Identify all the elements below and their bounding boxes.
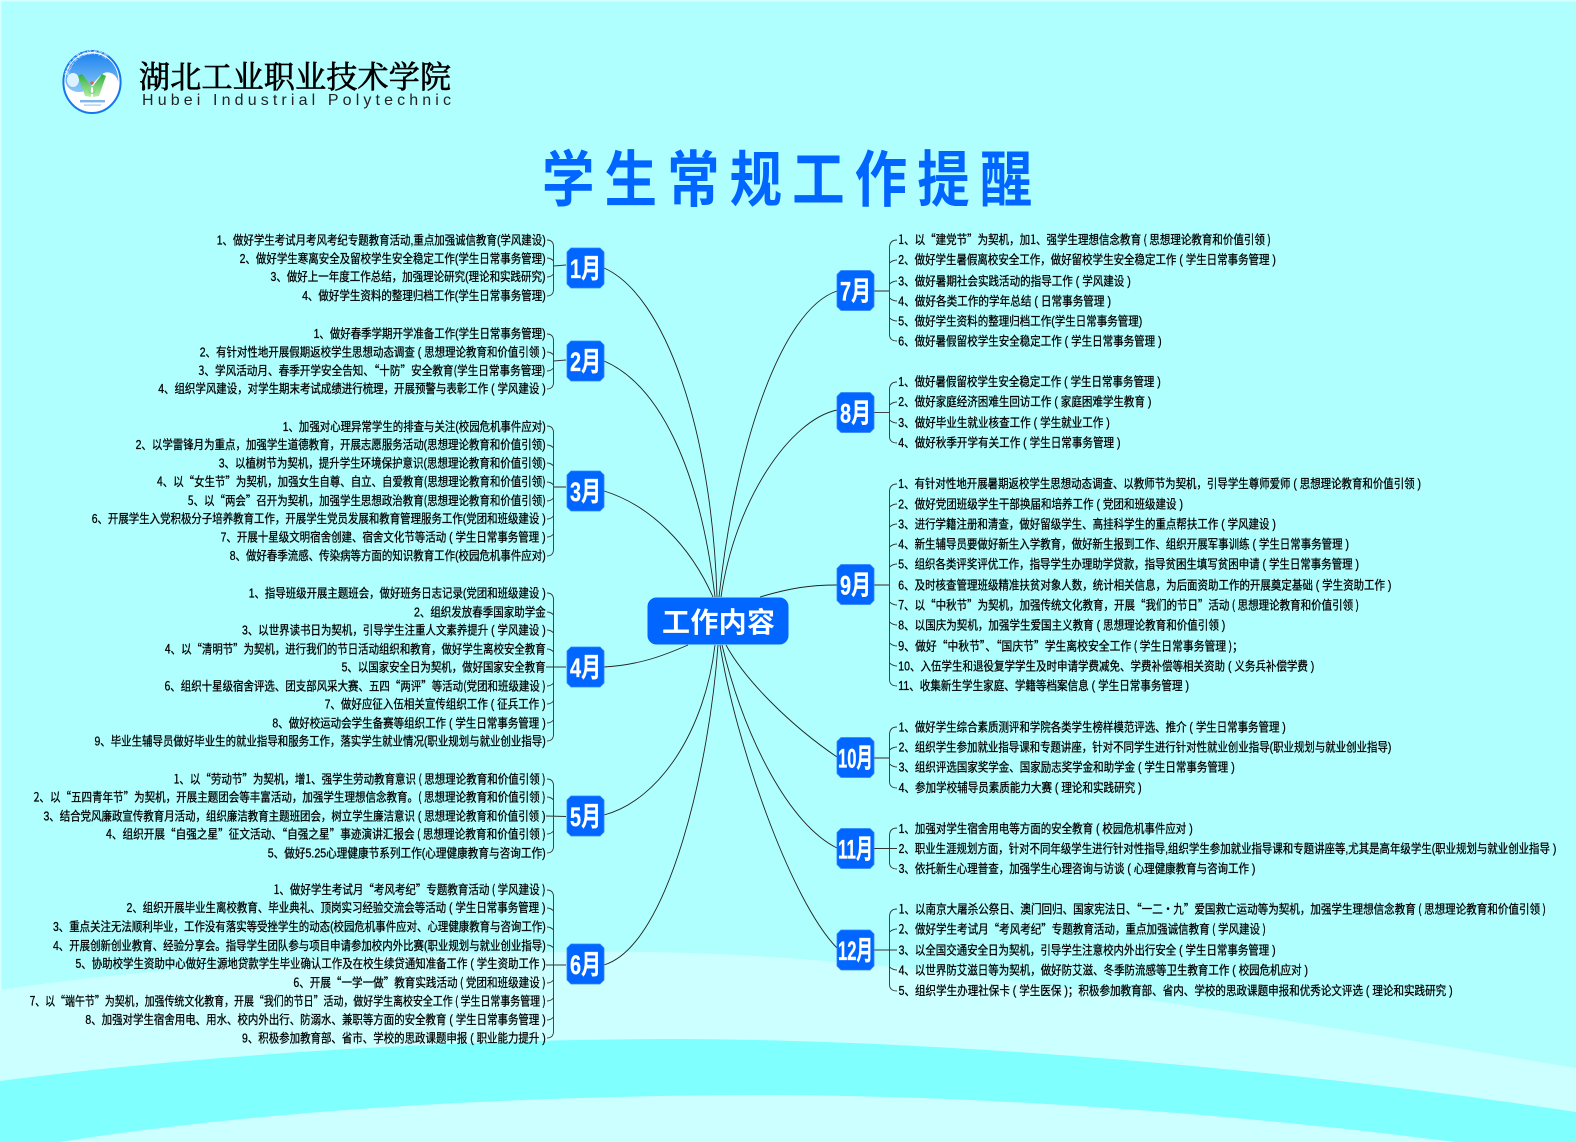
March bracket bbox=[547, 426, 554, 556]
panel: July bbox=[837, 229, 1276, 348]
April items: 8、做好校运动会学生备赛等组织工作 ( 学生日常事务管理 ) bbox=[272, 716, 546, 730]
October label: 10月 bbox=[838, 744, 873, 774]
February label bbox=[567, 341, 604, 381]
May label bbox=[567, 796, 604, 836]
April bracket bbox=[546, 593, 566, 741]
panel: April bbox=[94, 586, 604, 748]
April items: 3、以世界读书日为契机，引导学生注重人文素养提升 ( 学风建设 ) bbox=[242, 622, 546, 638]
February label: 2月 bbox=[570, 347, 601, 377]
logo: school emblem bbox=[62, 50, 122, 114]
September items: 2、做好党团班级学生干部换届和培养工作 ( 党团和班级建设 ) bbox=[898, 496, 1183, 512]
February bracket bbox=[547, 334, 566, 389]
January items bbox=[217, 232, 546, 303]
February items: 2、有针对性地开展假期返校学生思想动态调查 ( 思想理论教育和价值引领 ) bbox=[200, 344, 546, 360]
September items: 10、入伍学生和退役复学学生及时申请学费减免、学费补偿等相关资助 ( 义务兵补偿学费 ) bbox=[898, 658, 1314, 674]
July stem bbox=[874, 290, 890, 292]
August items: 3、做好毕业生就业核查工作 ( 学生就业工作 ) bbox=[898, 415, 1110, 430]
August items: 4、做好秋季开学有关工作 ( 学生日常事务管理 ) bbox=[898, 435, 1120, 450]
April items: 9、毕业生辅导员做好毕业生的就业指导和服务工作，落实学生就业情况(职业规划与就业创业指导) bbox=[94, 734, 546, 748]
November label bbox=[837, 828, 874, 868]
October label bbox=[837, 738, 874, 778]
September label: 9月 bbox=[840, 570, 871, 600]
June items: 7、以“端午节”为契机，加强传统文化教育，开展“我们的节日”活动，做好学生离校安全工作 ( 学生日常事务管理 ) bbox=[30, 990, 546, 1010]
April items bbox=[94, 586, 546, 748]
April items: 5、以国家安全日为契机，做好国家安全教育 bbox=[342, 660, 546, 674]
June label bbox=[567, 944, 604, 984]
October bracket bbox=[890, 727, 897, 788]
December items: 2、做好学生考试月“考风考纪”专题教育活动，重点加强诚信教育 ( 学风建设 ) bbox=[899, 918, 1266, 938]
school name: Hubei Industrial Polytechnic bbox=[142, 92, 451, 109]
June items: 9、积极参加教育部、省市、学校的思政课题申报 ( 职业能力提升 ) bbox=[242, 1030, 546, 1046]
panel: February bbox=[158, 326, 604, 396]
September items: 11、收集新生学生家庭、学籍等档案信息 ( 学生日常事务管理 ) bbox=[898, 678, 1189, 693]
October items: 1、做好学生综合素质测评和学院各类学生榜样模范评选、推介 ( 学生日常事务管理 ) bbox=[899, 720, 1286, 734]
January label: 1月 bbox=[570, 254, 601, 284]
March items: 8、做好春季流感、传染病等方面的知识教育工作(校园危机事件应对) bbox=[230, 548, 546, 563]
March items bbox=[92, 419, 546, 563]
March items: 6、开展学生入党积极分子培养教育工作，开展学生党员发展和教育管理服务工作(党团和班级建设 ) bbox=[92, 511, 546, 526]
September items: 7、以“中秋节”为契机，加强传统文化教育，开展“我们的节日”活动 ( 思想理论教育和价值引领 ) bbox=[898, 594, 1359, 614]
August items bbox=[898, 374, 1161, 450]
panel: December bbox=[837, 898, 1546, 998]
November items: 3、依托新生心理普查，加强学生心理咨询与访谈 ( 心理健康教育与咨询工作 ) bbox=[899, 861, 1255, 876]
March label: 3月 bbox=[570, 477, 601, 507]
March label bbox=[567, 471, 604, 511]
October stem bbox=[874, 757, 890, 759]
August bracket bbox=[890, 382, 897, 443]
July items: 2、做好学生暑假离校安全工作，做好留校学生安全稳定工作 ( 学生日常事务管理 ) bbox=[898, 252, 1276, 267]
September items: 4、新生辅导员要做好新生入学教育，做好新生报到工作、组织开展军事训练 ( 学生日常事务管理 ) bbox=[898, 536, 1349, 552]
January items: 4、做好学生资料的整理归档工作(学生日常事务管理) bbox=[302, 288, 546, 303]
panel: October bbox=[837, 720, 1391, 795]
December items: 4、以世界防艾滋日等为契机，做好防艾滋、冬季防流感等卫生教育工作 ( 校园危机应对 ) bbox=[899, 962, 1308, 978]
May items: 3、结合党风廉政宣传教育月活动，组织廉洁教育主题班团会，树立学生廉洁意识 ( 思想理论教育和价值引领 ) bbox=[44, 808, 546, 824]
April label: 4月 bbox=[570, 653, 601, 683]
July items: 5、做好学生资料的整理归档工作(学生日常事务管理) bbox=[898, 314, 1142, 328]
logo: school emblem: 湖北工业职业技术学院 bbox=[64, 50, 108, 76]
April label bbox=[567, 647, 604, 687]
January items: 2、做好学生寒离安全及留校学生安全稳定工作(学生日常事务管理) bbox=[240, 251, 546, 266]
September items: 5、组织各类评奖评优工作，指导学生办理助学贷款，指导贫困生填写贫困申请 ( 学生日常事务管理 ) bbox=[898, 556, 1359, 572]
September items: 8、以国庆为契机，加强学生爱国主义教育 ( 思想理论教育和价值引领 ) bbox=[898, 618, 1225, 632]
September items: 6、及时核查管理班级精准扶贫对象人数，统计相关信息，为后面资助工作的开展奠定基础 ( 学生资助工作 ) bbox=[898, 578, 1391, 592]
April items: 7、做好应征入伍相关宣传组织工作 ( 征兵工作 ) bbox=[325, 696, 546, 712]
November bracket bbox=[874, 828, 897, 869]
May label: 5月 bbox=[570, 802, 601, 832]
May items: 5、做好5.25心理健康节系列工作(心理健康教育与咨询工作) bbox=[268, 846, 546, 860]
March items: 7、开展十星级文明宿舍创建、宿舍文化节等活动 ( 学生日常事务管理 ) bbox=[221, 530, 546, 544]
panel: January bbox=[217, 232, 604, 303]
February items: 4、组织学风建设，对学生期末考试成绩进行梳理，开展预警与表彰工作 ( 学风建设 ) bbox=[158, 381, 546, 396]
panel: March bbox=[92, 419, 604, 563]
panel: August bbox=[837, 374, 1161, 450]
June items: 8、加强对学生宿舍用电、用水、校内外出行、防溺水、兼职等方面的安全教育 ( 学生日常事务管理 ) bbox=[85, 1012, 546, 1027]
November items bbox=[899, 821, 1556, 876]
October items: 3、组织评选国家奖学金、国家励志奖学金和助学金 ( 学生日常事务管理 ) bbox=[899, 760, 1235, 774]
panel: May bbox=[34, 768, 604, 860]
panel: November bbox=[837, 821, 1556, 876]
August label: 8月 bbox=[840, 398, 871, 428]
April items: 4、以“清明节”为契机，进行我们的节日活动组织和教育，做好学生离校安全教育 bbox=[165, 638, 546, 658]
panel: June bbox=[30, 879, 604, 1046]
September items: 3、进行学籍注册和清查，做好留级学生、高挂科学生的重点帮扶工作 ( 学风建设 ) bbox=[898, 516, 1276, 532]
July items: 1、以“建党节”为契机，加1、强学生理想信念教育 ( 思想理论教育和价值引领 ) bbox=[898, 229, 1271, 248]
October items: 4、参加学校辅导员素质能力大赛 ( 理论和实践研究 ) bbox=[899, 780, 1142, 795]
May items: 4、组织开展“自强之星”征文活动、“自强之星”事迹演讲汇报会 ( 思想理论教育和价值引领 ) bbox=[106, 824, 546, 842]
March items: 1、加强对心理异常学生的排查与关注(校园危机事件应对) bbox=[283, 419, 546, 434]
July items: 3、做好暑期社会实践活动的指导工作 ( 学风建设 ) bbox=[898, 274, 1131, 288]
July items bbox=[898, 229, 1276, 348]
March items: 2、以学雷锋月为重点，加强学生道德教育，开展志愿服务活动(思想理论教育和价值引领) bbox=[136, 437, 546, 452]
June label: 6月 bbox=[570, 950, 601, 980]
central node: work content bbox=[648, 598, 788, 644]
March stem bbox=[554, 486, 566, 488]
January label bbox=[567, 248, 604, 288]
June items: 4、开展创新创业教育、经验分享会。指导学生团队参与项目申请参加校内外比赛(职业规划与就业创业指导) bbox=[53, 938, 546, 953]
May items bbox=[34, 768, 546, 860]
September label bbox=[837, 564, 874, 604]
April items: 6、组织十星级宿舍评选、团支部风采大赛、五四“两评”等活动(党团和班级建设 ) bbox=[164, 676, 546, 694]
December items: 3、以全国交通安全日为契机，引导学生注意校内外出行安全 ( 学生日常事务管理 ) bbox=[899, 942, 1276, 958]
June bracket bbox=[546, 890, 566, 1038]
panel: September bbox=[837, 476, 1421, 693]
June items: 3、重点关注无法顺利毕业，工作没有落实等受挫学生的动态(校园危机事件应对、心理健康教育与咨询工作) bbox=[53, 919, 546, 934]
January bracket bbox=[547, 240, 566, 296]
July label bbox=[837, 270, 874, 310]
January items: 1、做好学生考试月考风考纪专题教育活动,重点加强诚信教育(学风建设) bbox=[217, 232, 546, 248]
June items: 2、组织开展毕业生离校教育、毕业典礼、顶岗实习经验交流会等活动 ( 学生日常事务管理 ) bbox=[126, 900, 546, 915]
April items: 2、组织发放春季国家助学金 bbox=[414, 604, 546, 620]
August items: 2、做好家庭经济困难生回访工作 ( 家庭困难学生教育 ) bbox=[898, 394, 1151, 409]
July label: 7月 bbox=[840, 276, 871, 306]
August items: 1、做好暑假留校学生安全稳定工作 ( 学生日常事务管理 ) bbox=[898, 374, 1161, 389]
March items: 5、以“两会”召开为契机，加强学生思想政治教育(思想理论教育和价值引领) bbox=[188, 490, 546, 509]
November label: 11月 bbox=[838, 834, 873, 864]
November items: 1、加强对学生宿舍用电等方面的安全教育 ( 校园危机事件应对 ) bbox=[899, 821, 1193, 836]
June items: 6、开展“一学一做”教育实践活动 ( 党团和班级建设 ) bbox=[293, 972, 546, 991]
June items: 5、协助校学生资助中心做好生源地贷款学生毕业确认工作及在校生续贷通知准备工作 ( 学生资助工作 ) bbox=[76, 956, 546, 971]
February items bbox=[158, 326, 546, 396]
May items: 1、以“劳动节”为契机，增1、强学生劳动教育意识 ( 思想理论教育和价值引领 ) bbox=[174, 768, 546, 788]
September bracket bbox=[890, 484, 897, 686]
September stem bbox=[874, 584, 890, 586]
June items: 1、做好学生考试月“考风考纪”专题教育活动 ( 学风建设 ) bbox=[274, 879, 546, 898]
August stem bbox=[874, 412, 890, 414]
September items bbox=[898, 476, 1421, 693]
July items: 4、做好各类工作的学年总结 ( 日常事务管理 ) bbox=[898, 294, 1111, 308]
September items: 9、做好“中秋节”、“国庆节”学生离校安全工作 ( 学生日常事务管理 )； bbox=[898, 636, 1243, 654]
school name: 湖北工业职业技术学院 bbox=[139, 60, 451, 95]
December label bbox=[837, 930, 874, 970]
July bracket bbox=[890, 240, 897, 341]
April items: 1、指导班级开展主题班会，做好班务日志记录(党团和班级建设 ) bbox=[249, 586, 546, 600]
May items: 2、以“五四青年节”为契机，开展主题团会等丰富活动，加强学生理想信念教育。( 思想理论教育和价值引领 ) bbox=[34, 786, 546, 806]
February items: 1、做好春季学期开学准备工作(学生日常事务管理) bbox=[314, 326, 546, 341]
December items bbox=[899, 898, 1546, 998]
July items: 6、做好暑假留校学生安全稳定工作 ( 学生日常事务管理 ) bbox=[898, 334, 1162, 348]
March items: 4、以“女生节”为契机，加强女生自尊、自立、自爱教育(思想理论教育和价值引领) bbox=[157, 471, 546, 490]
December bracket bbox=[874, 909, 897, 991]
October items bbox=[899, 720, 1391, 795]
connector curves from hub to months bbox=[604, 268, 837, 965]
title: 学生常规工作提醒 bbox=[542, 146, 1032, 215]
February items: 3、学风活动月、春季开学安全告知、“十防”安全教育(学生日常事务管理) bbox=[198, 360, 546, 379]
January items: 3、做好上一年度工作总结，加强理论研究(理论和实践研究) bbox=[270, 269, 546, 284]
central node: work content: 工作内容 bbox=[662, 607, 775, 638]
June items bbox=[30, 879, 546, 1046]
December label: 12月 bbox=[838, 936, 873, 966]
September items: 1、有针对性地开展暑期返校学生思想动态调查、以教师节为契机，引导学生尊师爱师 ( 思想理论教育和价值引领 ) bbox=[898, 476, 1421, 491]
May bracket bbox=[546, 779, 566, 853]
March items: 3、以植树节为契机，提升学生环境保护意识(思想理论教育和价值引领) bbox=[219, 456, 546, 470]
December items: 5、组织学生办理社保卡 ( 学生医保 )；积极参加教育部、省内、学校的思政课题申报和优秀论文评选 ( 理论和实践研究 ) bbox=[899, 983, 1453, 998]
October items: 2、组织学生参加就业指导课和专题讲座，针对不同学生进行针对性就业创业指导(职业规划与就业创业指导) bbox=[899, 740, 1391, 754]
August label bbox=[837, 392, 874, 432]
